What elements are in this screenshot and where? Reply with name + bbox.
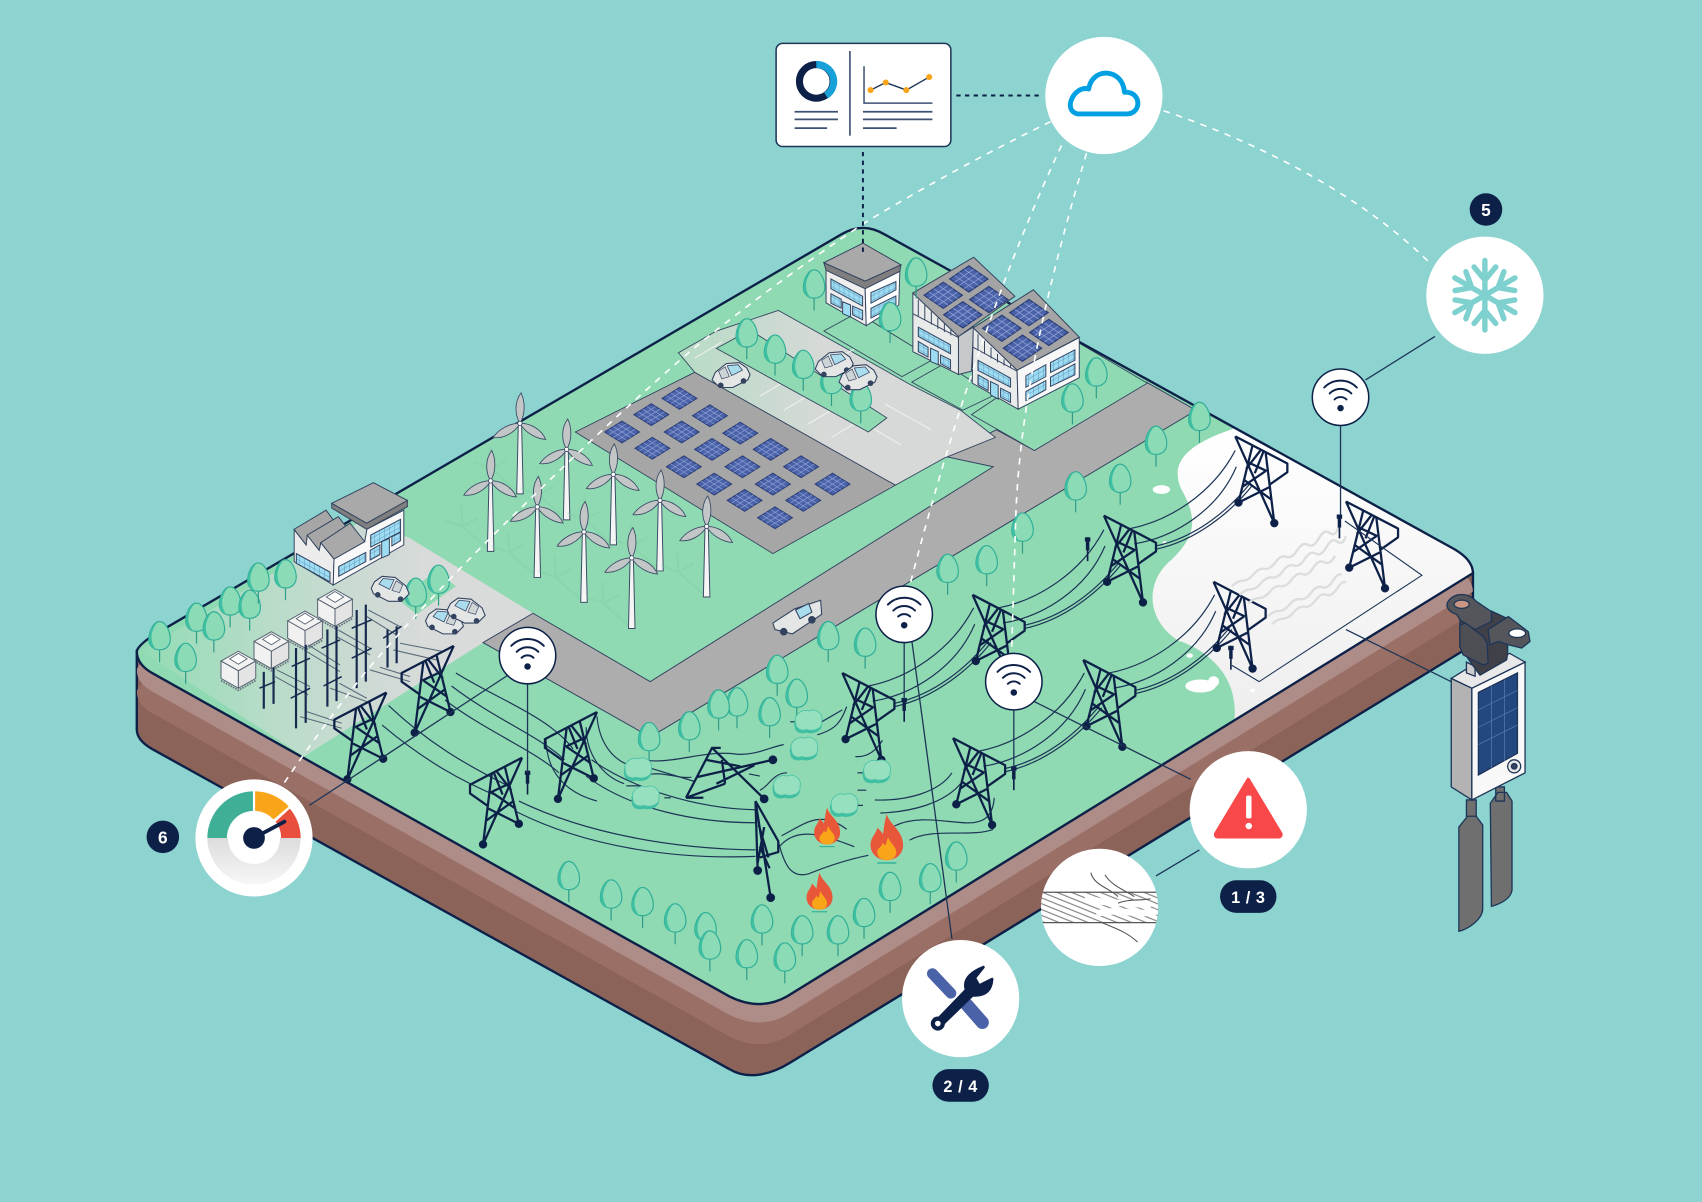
- green strip in lot: [716, 330, 887, 432]
- donut chart: [799, 65, 834, 98]
- fallen tower: [686, 748, 776, 802]
- wrench hole: [935, 1021, 941, 1026]
- clamp front arm: [1488, 617, 1530, 648]
- exclamation mark: [1246, 796, 1252, 829]
- gauge needle: [243, 822, 284, 849]
- icon: snowflake: [1449, 261, 1520, 330]
- gauge green segment: [207, 791, 253, 838]
- substation ground: [141, 523, 533, 757]
- substation gantries: [259, 605, 443, 728]
- broken wires near fallen tower: [626, 707, 994, 875]
- wrench handle end: [931, 1017, 945, 1031]
- clamp-on line sensor device: [1447, 594, 1530, 931]
- navy dotted dashboard links: [863, 96, 1042, 255]
- line sensors: [525, 514, 1342, 795]
- cloud callout: [1045, 37, 1163, 154]
- solar building 1: [913, 257, 1015, 374]
- wireless nodes: [499, 369, 1369, 710]
- dashboard panel: [776, 43, 951, 147]
- line chart: [864, 66, 932, 103]
- gauge orange segment: [255, 791, 289, 819]
- smoke puffs: [624, 710, 890, 817]
- pill: 2 / 4: 2 / 4: [943, 1078, 978, 1096]
- solar building 2: [972, 290, 1079, 409]
- device left face: [1451, 678, 1472, 800]
- road: [483, 382, 1196, 737]
- clamp inner block: [1460, 611, 1508, 675]
- right text lines: [863, 112, 932, 128]
- solar farm ground: [575, 372, 896, 554]
- device front face: [1472, 662, 1525, 800]
- badge: 5: [1470, 193, 1502, 226]
- solar farm panels: [605, 387, 850, 529]
- power line towers and wires: [334, 436, 1398, 875]
- parking markings: [695, 342, 931, 445]
- damaged conductor callout: [1037, 849, 1163, 966]
- cars: [371, 352, 877, 635]
- platform: soil sides: [136, 572, 1474, 1076]
- pill: 1 / 3: 1 / 3: [1231, 889, 1265, 907]
- snow field: [1153, 418, 1487, 722]
- collapsed tower seen edge-on: [754, 801, 778, 901]
- white dashed data links: [284, 111, 1431, 783]
- icon: cloud: [1070, 73, 1138, 114]
- pill: 2 / 4: [932, 1069, 989, 1102]
- green parcel beside factory: [396, 572, 456, 614]
- status lens: [1508, 760, 1521, 773]
- clamp plate: [1460, 623, 1488, 665]
- office building: [824, 243, 901, 326]
- alert callout: [1190, 751, 1307, 868]
- parking lot: [678, 310, 995, 485]
- left text lines: [795, 112, 838, 128]
- building lawns: [824, 313, 1147, 450]
- badge: 6: [147, 821, 179, 853]
- pill: 1 / 3: [1220, 880, 1276, 913]
- snow callout: [1426, 237, 1544, 354]
- icon: wrench: [937, 967, 992, 1026]
- wires left section: [382, 673, 755, 857]
- divider: [849, 51, 851, 136]
- clamp rear arm: [1447, 594, 1491, 630]
- trees: [149, 258, 1210, 983]
- solar panel: [1478, 673, 1517, 775]
- collar: [1466, 662, 1475, 676]
- snow parcel outline: [1232, 521, 1422, 682]
- gauge callout: [195, 779, 313, 897]
- platform: top surface: [137, 228, 1473, 1004]
- gauge lower band: [207, 838, 301, 885]
- sensor probes: [1459, 787, 1512, 931]
- ground zones: [141, 310, 1487, 757]
- snow patches: [1153, 485, 1255, 693]
- substation transformers: [221, 589, 352, 690]
- fires: [806, 808, 903, 912]
- icon: screwdriver: [932, 974, 982, 1022]
- spans between towers on the right: [868, 608, 991, 707]
- icy wires: [1232, 528, 1346, 624]
- wind turbines: [445, 393, 735, 628]
- device top face: [1451, 653, 1525, 688]
- pickup truck: [773, 600, 822, 635]
- icon: warning triangle: [1215, 779, 1281, 837]
- connector lines to callouts: [309, 336, 1451, 939]
- gauge red segment: [276, 809, 301, 838]
- factory: [294, 483, 407, 585]
- badge: 6: 6: [158, 827, 168, 847]
- platform outline: [137, 228, 1473, 1004]
- maintenance callout: [902, 940, 1019, 1057]
- badge: 5: 5: [1481, 200, 1491, 220]
